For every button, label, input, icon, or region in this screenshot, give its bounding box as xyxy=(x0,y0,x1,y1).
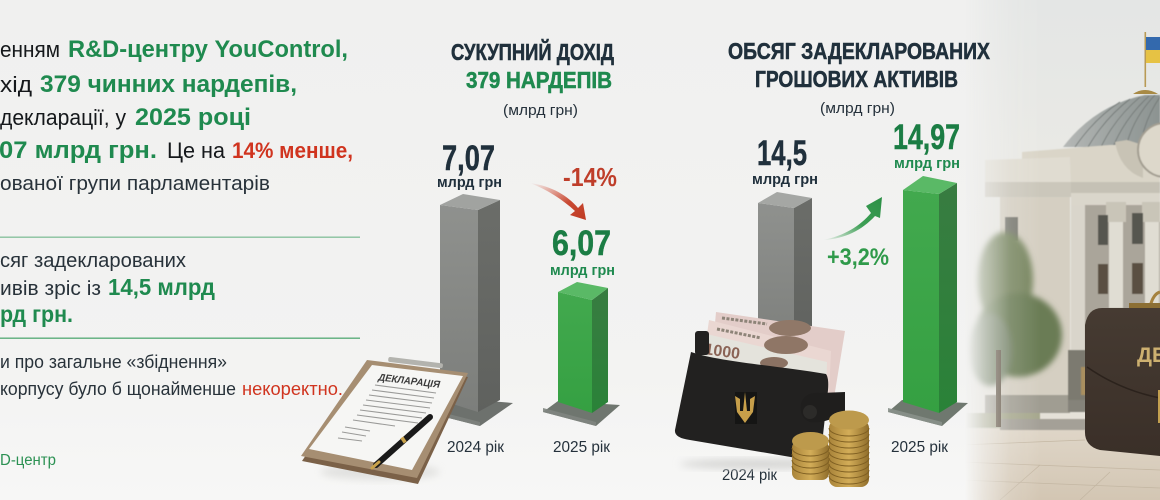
icon: wallet with banknotes and coins xyxy=(675,312,869,487)
intro line 3 xyxy=(0,104,251,131)
value: 14,97: млрд грн xyxy=(894,155,960,172)
arrow: increase xyxy=(823,197,882,240)
value: 14,5 xyxy=(752,134,818,188)
arrow: decrease xyxy=(530,183,586,220)
conclusion line 2: некоректно. xyxy=(242,379,343,399)
intro line 4: 07 млрд грн. xyxy=(0,137,157,164)
tree xyxy=(968,232,1062,427)
heading: income: 379 НАРДЕПІВ xyxy=(466,67,612,93)
intro line 4: Це на xyxy=(167,138,226,163)
source: D-центр xyxy=(0,452,56,469)
label: 2025: 2025 рік xyxy=(891,439,949,456)
change: -14%: -14% xyxy=(563,162,617,192)
value: 6,07: 6,07 xyxy=(552,224,611,263)
intro line 2: 379 чинних нардепів, xyxy=(40,71,297,98)
conclusion line 2: корпусу було б щонайменше xyxy=(0,379,236,399)
bar: 2025 income xyxy=(543,282,620,426)
flag xyxy=(1133,32,1160,94)
assets line 2 xyxy=(0,274,215,300)
divider xyxy=(0,338,360,339)
change: +3,2%: +3,2% xyxy=(827,244,889,271)
divider xyxy=(0,236,360,238)
value: 7,07: млрд грн xyxy=(437,174,502,191)
intro line 1: R&D-центру YouControl, xyxy=(68,36,348,63)
intro line 2: хід xyxy=(0,72,32,97)
label: 2024: 2024 рік xyxy=(722,467,778,484)
value: 14,97: 14,97 xyxy=(893,118,960,157)
intro line 5: ованої групи парламентарів xyxy=(0,173,270,195)
banknotes xyxy=(698,312,845,410)
panel: assets chart xyxy=(722,38,990,484)
heading: assets: ГРОШОВИХ АКТИВІВ xyxy=(755,66,958,92)
value: 14,5: 14,5 xyxy=(757,134,807,173)
value: 14,97 xyxy=(893,118,960,172)
building: Verkhovna Rada xyxy=(960,95,1160,430)
heading: assets: (млрд грн) xyxy=(820,100,895,117)
assets line 1: сяг задекларованих xyxy=(0,250,186,272)
heading: income: СУКУПНИЙ ДОХІД xyxy=(451,38,614,65)
panel: income chart xyxy=(425,38,620,456)
heading: assets: ОБСЯГ ЗАДЕКЛАРОВАНИХ xyxy=(728,38,990,64)
heading: assets xyxy=(728,38,990,117)
text block: intro xyxy=(0,36,353,195)
pavement xyxy=(960,428,1160,500)
intro line 3: 2025 році xyxy=(135,104,251,131)
icon: clipboard declaration: ДЕКЛАРАЦІЯ xyxy=(377,372,441,391)
label: 2025: 2025 рік xyxy=(553,439,611,456)
icon: pen xyxy=(372,417,430,468)
heading: income: (млрд грн) xyxy=(503,102,578,119)
assets line 2: ивів зріс із xyxy=(0,278,101,300)
value: 7,07 xyxy=(437,139,502,191)
wallet body xyxy=(675,331,845,462)
value: 6,07: млрд грн xyxy=(550,262,615,279)
bar: 2024 income xyxy=(425,194,513,426)
conclusion line 1: и про загальне «збіднення» xyxy=(0,352,227,372)
panel: parliament photo xyxy=(960,0,1160,500)
intro line 1: енням xyxy=(0,37,60,62)
intro line 3: декларації, у xyxy=(0,105,126,130)
assets line 2: 14,5 млрд xyxy=(108,274,215,300)
text block: assets xyxy=(0,250,215,327)
coins small stack xyxy=(792,432,829,480)
label: 2024: 2024 рік xyxy=(447,439,505,456)
value: 6,07 xyxy=(550,224,615,279)
icon: trident xyxy=(735,392,757,424)
icon: clipboard declaration xyxy=(301,357,468,484)
value: 7,07: 7,07 xyxy=(442,139,495,178)
assets line 3: рд грн. xyxy=(0,301,73,327)
value: 14,5: млрд грн xyxy=(752,171,818,188)
heading: income xyxy=(451,38,614,119)
bar: 2025 assets xyxy=(888,176,968,426)
intro line 4: 14% менше, xyxy=(232,138,353,163)
coins large stack xyxy=(829,410,869,487)
bar: 2024 assets xyxy=(758,192,812,360)
icon: briefcase xyxy=(1085,292,1160,456)
banknotes: 1000 xyxy=(703,341,741,363)
text block: conclusion xyxy=(0,352,343,399)
intro line 4 xyxy=(0,137,353,164)
sky xyxy=(980,0,1160,420)
